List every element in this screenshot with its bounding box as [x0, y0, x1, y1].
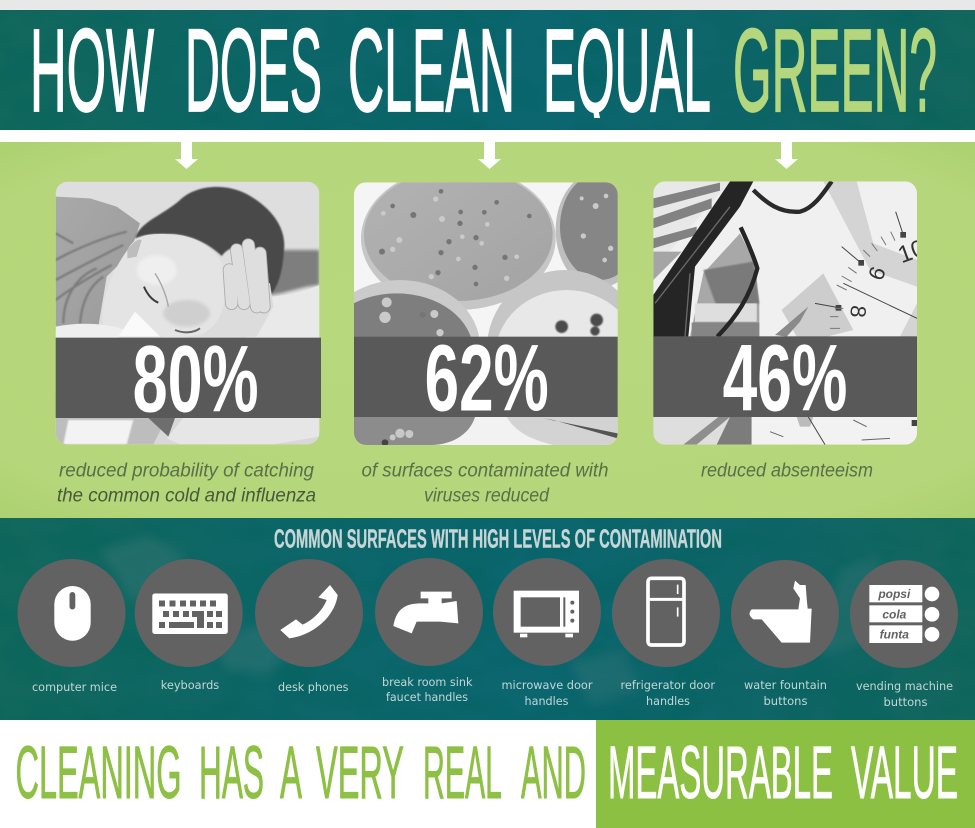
footer slogan green text — [16, 731, 586, 814]
item: computer mice: computer mice — [32, 680, 117, 694]
item: vending machine buttons: funta — [880, 627, 909, 641]
caption: 80%: the common cold and influenza — [57, 486, 316, 506]
caption: 62% — [362, 460, 608, 506]
item: vending machine buttons: popsi — [877, 587, 911, 601]
stat band 46%: 46% — [723, 326, 847, 432]
title: CLEAN — [348, 5, 515, 137]
item: water fountain buttons: water fountain — [744, 678, 827, 692]
item: desk phones: desk phones — [278, 680, 348, 694]
title: EQUAL — [543, 5, 711, 137]
item: break room sink faucet handles — [375, 558, 483, 704]
title — [34, 28, 936, 118]
item: water fountain buttons: buttons — [764, 694, 808, 708]
item: vending machine buttons: vending machine — [856, 679, 953, 693]
white separator — [0, 130, 975, 142]
caption: 62%: of surfaces contaminated with — [362, 460, 608, 482]
footer right — [596, 720, 975, 828]
item: refrigerator door handles — [612, 559, 720, 708]
footer slogan green text: A — [280, 731, 302, 814]
arrow 1 — [175, 142, 198, 169]
item: vending machine buttons: cola — [882, 607, 907, 621]
title: HOW — [30, 5, 154, 137]
title: DOES — [185, 5, 322, 137]
footer slogan green text: REAL — [423, 731, 502, 814]
photo: glasses, money and clock: 9 — [863, 263, 891, 283]
footer left — [0, 720, 596, 828]
photo: glasses, money and clock — [653, 181, 929, 445]
photo: glasses, money and clock: 10 — [894, 234, 929, 269]
footer slogan green text: CLEANING — [16, 731, 182, 814]
photo: woman with a cold — [56, 182, 321, 445]
item: refrigerator door handles: handles — [646, 694, 690, 708]
footer slogan green text: HAS — [199, 731, 264, 814]
caption: 46%: reduced absenteeism — [701, 460, 873, 482]
stat band 80%: 80% — [133, 327, 259, 433]
item: microwave door handles: handles — [524, 694, 569, 708]
photo: petri dishes — [354, 182, 618, 445]
item: computer mice — [18, 559, 126, 694]
caption: 62%: viruses reduced — [424, 486, 550, 506]
item: microwave door handles — [493, 558, 601, 708]
arrow 2 — [478, 142, 501, 169]
item: vending machine buttons: buttons — [884, 695, 928, 709]
item: refrigerator door handles: refrigerator door — [620, 678, 715, 692]
caption: 80% — [57, 460, 316, 506]
title banner — [0, 5, 975, 137]
caption: 80%: reduced probability of catching — [59, 460, 314, 482]
stat band 62%: 62% — [425, 326, 549, 432]
footer slogan green text: VERY — [316, 731, 404, 814]
item: break room sink faucet handles: break room sink — [382, 675, 473, 689]
photo: glasses, money and clock: 8 — [845, 304, 871, 319]
item: keyboards — [135, 559, 243, 692]
surfaces panel — [0, 518, 975, 720]
item: microwave door handles: microwave door — [502, 678, 593, 692]
arrow 3 — [775, 142, 798, 169]
item: desk phones — [255, 559, 363, 694]
item: keyboards: keyboards — [161, 678, 219, 692]
item: vending machine buttons — [850, 560, 958, 709]
text: AND — [521, 731, 586, 814]
top grey strip — [0, 0, 975, 10]
item: water fountain buttons — [731, 560, 839, 708]
green stats panel — [0, 142, 975, 518]
item: break room sink faucet handles: faucet handles — [386, 690, 468, 704]
